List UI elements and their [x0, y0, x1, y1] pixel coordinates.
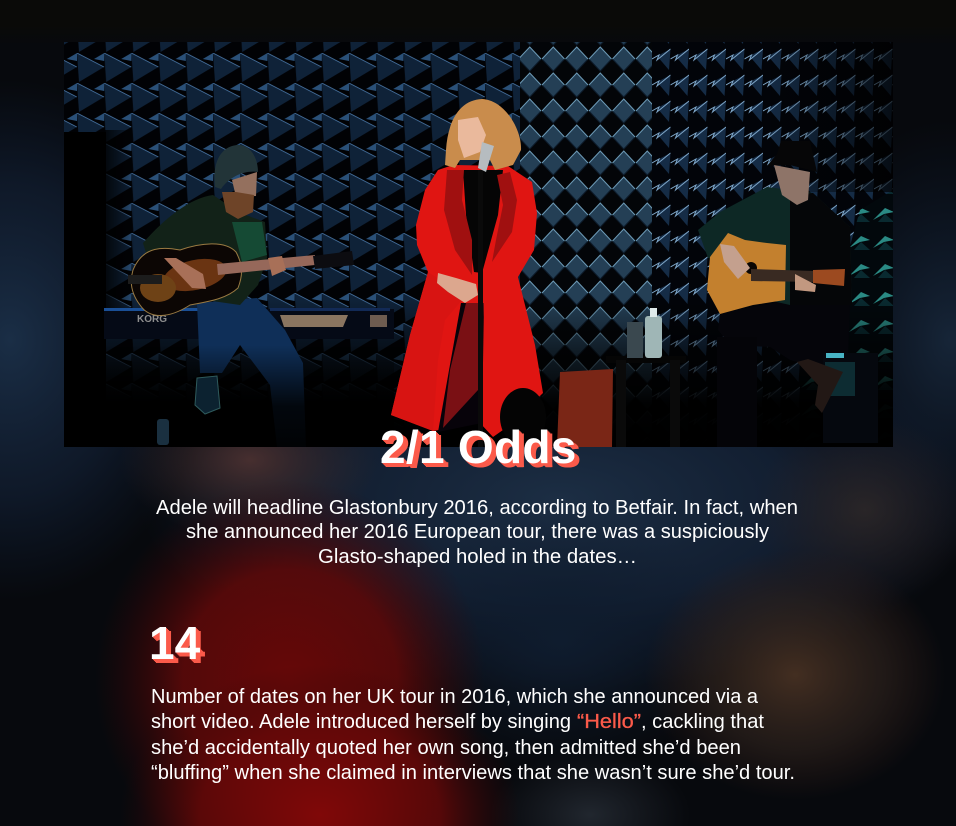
guitar neck and headstock [217, 255, 315, 275]
beard [222, 192, 254, 219]
detail paragraph: short video. Adele introduced herself by singing [151, 711, 571, 733]
highlighted song title: “Hello” [577, 711, 641, 733]
guitarist right [698, 141, 878, 447]
guitar body [128, 244, 242, 316]
heading: 14: 14 [149, 617, 200, 669]
red chair [557, 369, 613, 447]
Adele in red coat [391, 99, 543, 447]
shoe [195, 376, 220, 414]
sound hole and neck [745, 262, 757, 274]
guitarist left [128, 145, 354, 447]
coat [391, 165, 543, 437]
jeans [197, 298, 305, 430]
intro paragraph: she announced her 2016 European tour, there was a suspiciously [186, 521, 769, 543]
photo: Adele performing with two guitarists [64, 42, 893, 447]
keyboard: KORG [137, 314, 167, 325]
jacket [698, 187, 852, 305]
hands [720, 244, 750, 279]
hands [437, 273, 478, 303]
detail paragraph: she’d accidentally quoted her own song, then admitted she’d been [151, 737, 741, 759]
arms and hands [164, 258, 206, 289]
fringe [444, 170, 472, 275]
guitar body [707, 233, 786, 314]
detail paragraph: “bluffing” when she claimed in interviews that she wasn’t sure she’d tour. [151, 762, 795, 784]
heading: 2/1 Odds: 2/1 Odds [380, 421, 577, 473]
black dress [463, 170, 503, 273]
hat [767, 141, 817, 172]
darkness over lower legs [104, 345, 394, 447]
intro paragraph: Glasto-shaped holed in the dates… [318, 546, 637, 568]
hair [445, 99, 521, 170]
foreground head silhouette [500, 388, 540, 430]
side table, glass and bottle [616, 308, 686, 447]
detail paragraph: Number of dates on her UK tour in 2016, which she announced via a [151, 686, 759, 708]
face [774, 165, 810, 205]
shoe [797, 359, 843, 413]
foam wall backdrop [64, 42, 893, 447]
keyboard [104, 308, 394, 339]
amp panel [823, 353, 878, 443]
intro paragraph: Adele will headline Glastonbury 2016, according to Betfair. In fact, when [156, 497, 798, 519]
small water bottle [157, 419, 169, 445]
beanie [214, 145, 258, 189]
legs and stool [718, 302, 846, 362]
detail paragraph: , cackling that [641, 711, 764, 733]
microphone and stand [478, 270, 483, 447]
face [232, 172, 257, 197]
detail paragraph [151, 686, 795, 784]
face [458, 117, 486, 158]
intro paragraph [156, 497, 798, 568]
sweater [143, 195, 267, 305]
